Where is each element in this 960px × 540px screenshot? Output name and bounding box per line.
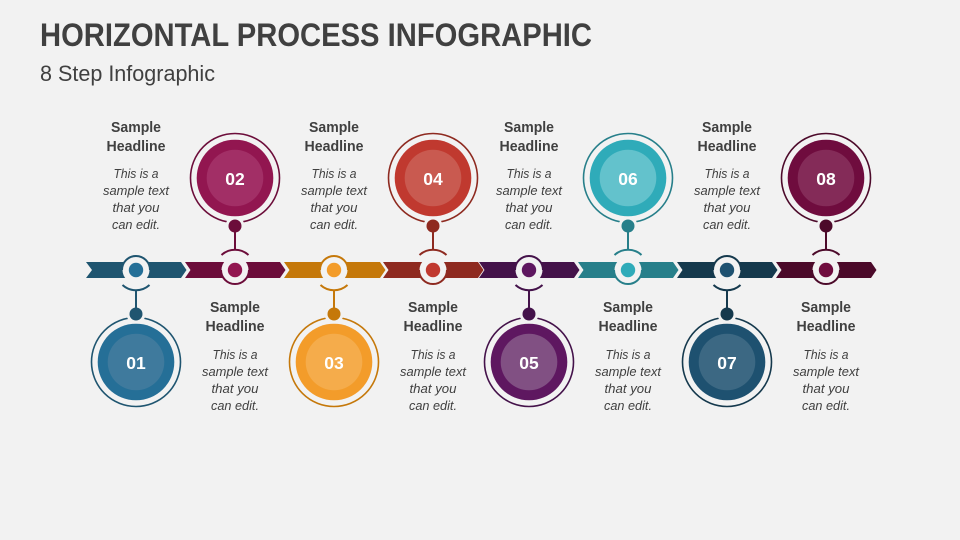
headline 1: Sample — [111, 119, 161, 136]
timeline node 1 — [122, 256, 150, 284]
text 3: that you — [310, 200, 358, 215]
subtitle: 8 Step Infographic — [40, 61, 215, 86]
text 2: sample text — [202, 364, 269, 379]
timeline node 8 — [812, 256, 840, 284]
connector 8 — [812, 231, 840, 255]
headline 4: Sample — [408, 299, 458, 316]
headline 5: Sample — [504, 119, 554, 136]
arrow segment 6 — [578, 262, 678, 278]
text 8: This is a — [804, 347, 848, 362]
headline 3 — [304, 119, 364, 155]
badge 5: 05 — [519, 353, 539, 373]
arrow segment 4 — [383, 262, 484, 278]
timeline node 5 — [515, 256, 543, 284]
text 6: sample text — [595, 364, 662, 379]
headline 5 — [500, 119, 558, 155]
text 1: can edit. — [112, 217, 160, 232]
text 5 — [496, 166, 563, 232]
connector 6 — [614, 231, 642, 255]
text 2: can edit. — [211, 398, 259, 413]
text 5: can edit. — [505, 217, 553, 232]
badge 8 — [782, 134, 870, 236]
connector 5 — [516, 285, 542, 309]
headline 3: Sample — [309, 119, 359, 136]
text 7: can edit. — [703, 217, 751, 232]
badge 3: 03 — [324, 353, 344, 373]
headline 4: Headline — [404, 318, 462, 335]
arrow segment 5 — [479, 262, 580, 278]
headline 8 — [796, 299, 856, 335]
text 8 — [793, 347, 860, 413]
headline 2: Headline — [206, 318, 264, 335]
headline 5: Headline — [500, 138, 558, 155]
title: HORIZONTAL PROCESS INFOGRAPHIC — [40, 17, 592, 53]
text 6 — [595, 347, 662, 413]
headline 2 — [206, 299, 264, 335]
headline 7: Headline — [698, 138, 756, 155]
headline 8: Headline — [796, 318, 856, 335]
headline 8: Sample — [801, 299, 851, 316]
arrow segment 2 — [185, 262, 286, 278]
headline 6 — [598, 299, 658, 335]
text 6: that you — [604, 381, 652, 396]
connector 3 — [320, 285, 348, 309]
text 4: This is a — [410, 347, 456, 362]
text 3: can edit. — [310, 217, 358, 232]
headline 3: Headline — [304, 138, 364, 155]
badge 2 — [190, 134, 280, 236]
connector 1 — [122, 285, 150, 309]
text 2 — [202, 347, 269, 413]
badge 6: 06 — [618, 169, 638, 189]
headline 7 — [698, 119, 756, 155]
text 4: sample text — [400, 364, 467, 379]
text 2: that you — [212, 381, 258, 396]
step 3 — [284, 119, 386, 406]
timeline node 4 — [419, 256, 447, 284]
text 8: sample text — [793, 364, 860, 379]
arrow segment 8 — [776, 262, 876, 278]
step 8 — [776, 134, 876, 413]
step 2 — [185, 134, 286, 413]
text 4 — [400, 347, 467, 413]
badge 5 — [484, 304, 574, 406]
timeline node 7 — [713, 256, 741, 284]
text 5: that you — [506, 200, 552, 215]
text 6: can edit. — [604, 398, 652, 413]
headline 2: Sample — [210, 299, 260, 316]
text 7: that you — [704, 200, 750, 215]
text 8: that you — [802, 381, 850, 396]
badge 3 — [290, 304, 378, 406]
text 6: This is a — [606, 347, 650, 362]
text 5: This is a — [506, 166, 552, 181]
timeline node 2 — [221, 256, 249, 284]
badge 1: 01 — [126, 353, 146, 373]
step 1 — [86, 119, 186, 406]
arrow segment 3 — [284, 262, 386, 278]
text 4: can edit. — [409, 398, 457, 413]
badge 7 — [682, 304, 772, 406]
text 4: that you — [410, 381, 456, 396]
text 7: This is a — [704, 166, 750, 181]
timeline node 6 — [614, 256, 642, 284]
badge 4: 04 — [423, 169, 443, 189]
step 7 — [677, 119, 778, 406]
timeline node 3 — [320, 256, 348, 284]
headline 1 — [106, 119, 166, 155]
headline 6: Headline — [598, 318, 658, 335]
step 6 — [578, 134, 678, 413]
headline 7: Sample — [702, 119, 752, 136]
text 8: can edit. — [802, 398, 850, 413]
connector 2 — [222, 231, 248, 255]
text 7 — [694, 166, 761, 232]
connector 7 — [714, 285, 740, 309]
badge 6 — [584, 134, 672, 236]
badge 2: 02 — [225, 169, 245, 189]
text 1: that you — [112, 200, 160, 215]
text 1 — [103, 166, 170, 232]
arrow segment 1 — [86, 262, 186, 278]
headline 4 — [404, 299, 462, 335]
headline 6: Sample — [603, 299, 653, 316]
text 5: sample text — [496, 183, 563, 198]
badge 8: 08 — [816, 169, 836, 189]
text 2: This is a — [212, 347, 258, 362]
text 3: sample text — [301, 183, 368, 198]
step 4 — [383, 134, 484, 413]
text 3: This is a — [312, 166, 356, 181]
text 7: sample text — [694, 183, 761, 198]
text 1: This is a — [114, 166, 158, 181]
text 3 — [301, 166, 368, 232]
step 5 — [479, 119, 580, 406]
connector 4 — [420, 231, 446, 255]
text 1: sample text — [103, 183, 170, 198]
badge 4 — [388, 134, 478, 236]
arrow segment 7 — [677, 262, 778, 278]
headline 1: Headline — [106, 138, 166, 155]
badge 7: 07 — [717, 353, 737, 373]
badge 1 — [92, 304, 180, 406]
